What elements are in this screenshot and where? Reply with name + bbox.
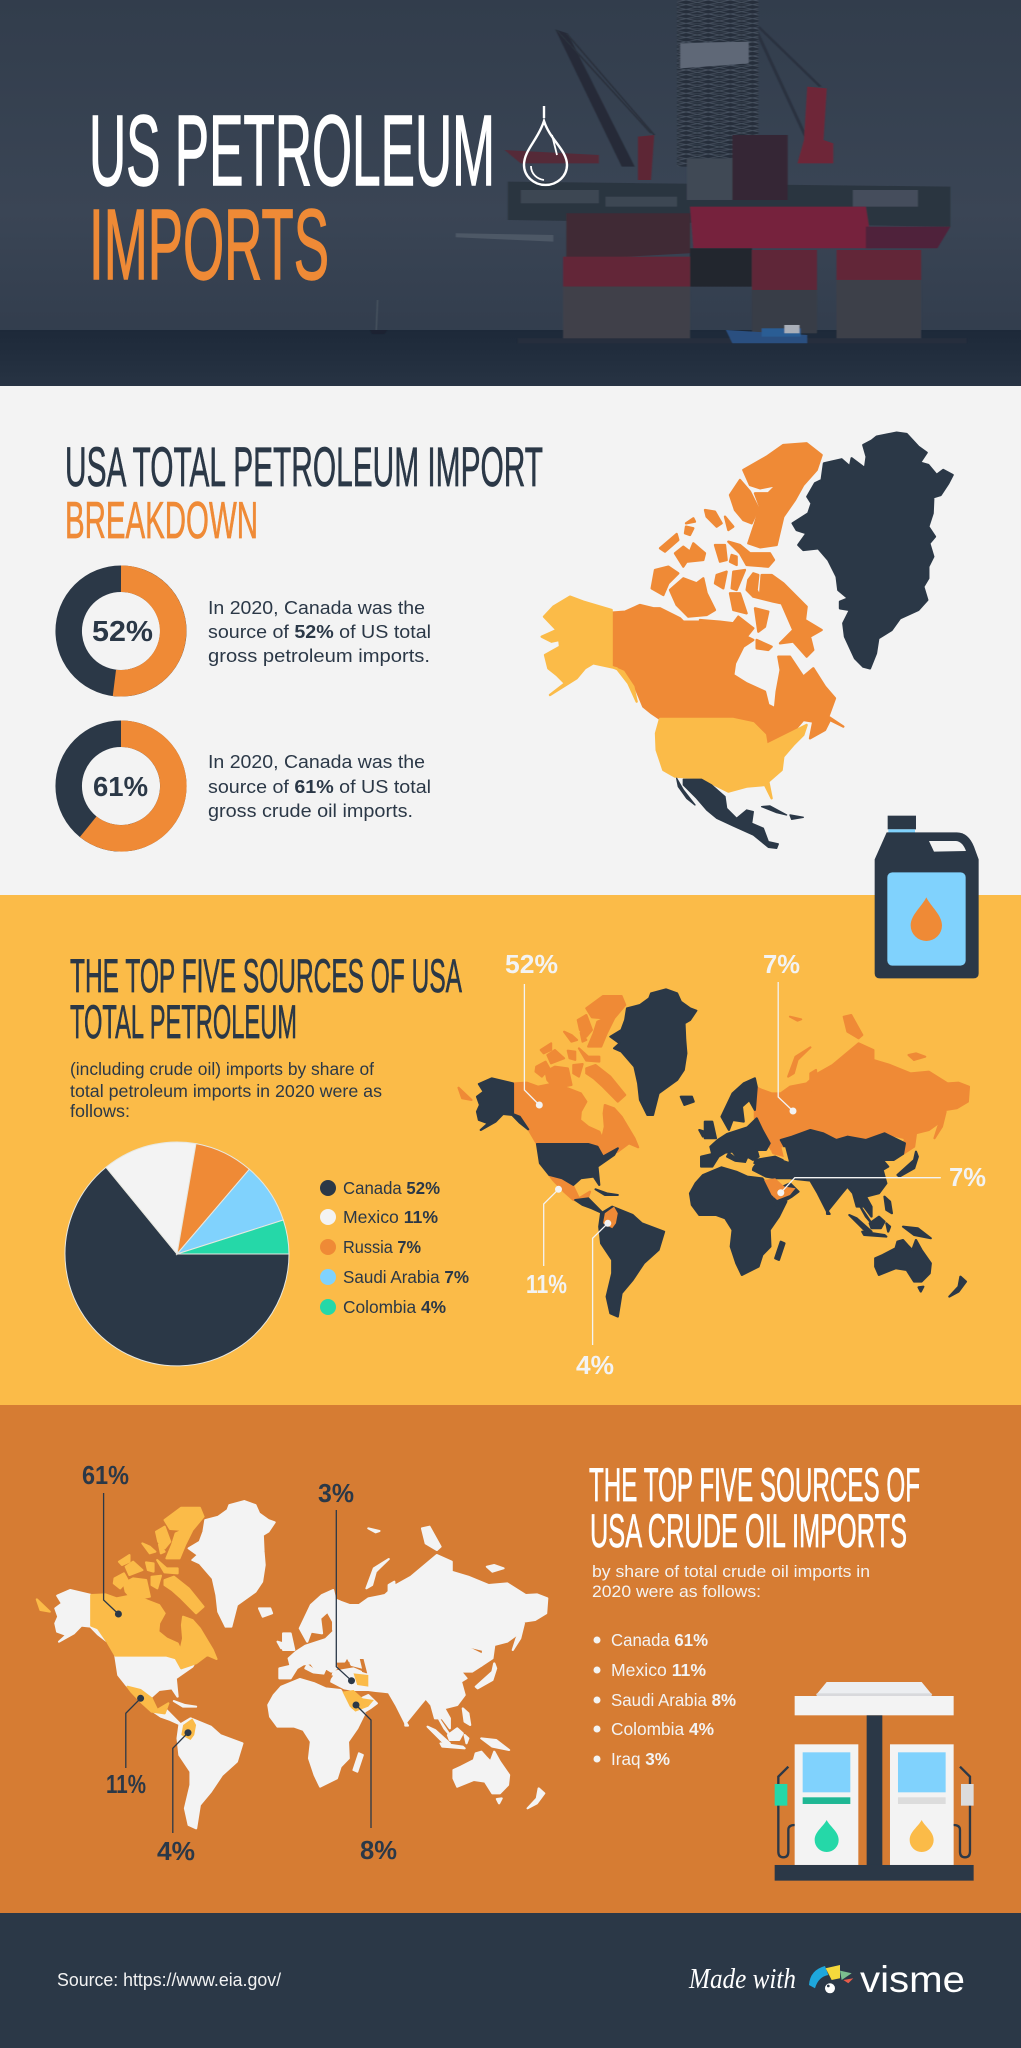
- illustration: oil rig: [370, 0, 967, 343]
- map: North America: [542, 433, 953, 848]
- heading: [65, 435, 543, 550]
- legend: Saudi Arabia 7%: [343, 1267, 469, 1287]
- legend: Colombia 4%: [343, 1297, 446, 1317]
- title: US PETROLEUM: [89, 95, 495, 207]
- donut chart 52%: 52%: [92, 616, 153, 648]
- heading: [589, 1458, 920, 1557]
- bullet list: [594, 1630, 736, 1769]
- bullet list: Mexico 11%: [611, 1660, 706, 1680]
- text block: intro: [70, 1059, 382, 1121]
- callouts: petroleum shares: 7%: [763, 949, 800, 979]
- text block: 52%: [208, 597, 431, 666]
- text block: intro: (including crude oil) imports by share of: [70, 1059, 374, 1079]
- donut chart 61%: 61%: [93, 771, 148, 802]
- icon: oil drop: [524, 106, 567, 185]
- callouts: crude oil shares: 11%: [106, 1769, 146, 1799]
- bullet list: Colombia 4%: [611, 1719, 714, 1739]
- legend: Russia 7%: [343, 1237, 421, 1257]
- callouts: crude oil shares: [82, 1460, 397, 1866]
- callouts: crude oil shares: 8%: [360, 1835, 397, 1865]
- title: IMPORTS: [89, 189, 329, 301]
- donut chart 52%: [69, 579, 173, 683]
- callouts: petroleum shares: 52%: [505, 949, 558, 979]
- callouts: crude oil shares: 3%: [318, 1478, 354, 1508]
- legend: [320, 1178, 469, 1317]
- callouts: crude oil shares: 4%: [157, 1836, 195, 1866]
- text block: 61%: gross crude oil imports.: [208, 800, 413, 821]
- callouts: petroleum shares: 7%: [949, 1162, 986, 1192]
- map: world, crude oil: [37, 1501, 547, 1828]
- heading: BREAKDOWN: [65, 492, 258, 550]
- panel: top five sources of crude oil: [0, 1405, 1021, 1913]
- heading: USA TOTAL PETROLEUM IMPORT: [65, 435, 543, 498]
- callouts: petroleum shares: [505, 949, 986, 1380]
- Greenland: [793, 433, 953, 668]
- icon: oil jerrycan: [875, 816, 979, 978]
- panel: hero photo of offshore oil rig: [0, 0, 1021, 386]
- panel: total import breakdown: [0, 386, 1021, 895]
- text block: 52%: gross petroleum imports.: [208, 645, 430, 666]
- legend: Mexico 11%: [343, 1207, 438, 1227]
- bullet list: Iraq 3%: [611, 1749, 670, 1769]
- logo: visme: [809, 1959, 965, 2000]
- heading: THE TOP FIVE SOURCES OF USA: [70, 949, 462, 1002]
- pie chart: [65, 1142, 289, 1366]
- panel: top five sources of total petroleum: [0, 895, 1021, 1405]
- icon: gas pumps: [775, 1682, 974, 1881]
- donut chart 61%: [69, 734, 173, 838]
- callouts: petroleum shares: 11%: [526, 1269, 567, 1299]
- text block: intro: 2020 were as follows:: [592, 1582, 761, 1601]
- text block: 61%: In 2020, Canada was the: [208, 751, 425, 772]
- callouts: petroleum shares: 4%: [576, 1350, 614, 1380]
- text block: 52%: source of 52% of US total: [208, 621, 431, 642]
- heading: TOTAL PETROLEUM: [70, 995, 297, 1048]
- map: world, petroleum: [459, 989, 969, 1317]
- title: [89, 95, 495, 301]
- heading: [70, 949, 462, 1048]
- text block: 61%: source of 61% of US total: [208, 776, 431, 797]
- bullet list: Saudi Arabia 8%: [611, 1690, 736, 1710]
- source text: Source: https://www.eia.gov/: [57, 1970, 281, 1990]
- Canada: [612, 443, 843, 745]
- panel: footer: [0, 1913, 1021, 2048]
- text block: intro: by share of total crude oil imports in: [592, 1562, 870, 1581]
- text block: 61%: [208, 751, 431, 821]
- legend: Canada 52%: [343, 1178, 440, 1198]
- text block: intro: total petroleum imports in 2020 were as: [70, 1081, 382, 1101]
- text block: intro: [592, 1562, 870, 1601]
- text block: 52%: In 2020, Canada was the: [208, 597, 425, 618]
- callouts: crude oil shares: 61%: [82, 1460, 129, 1490]
- bullet list: Canada 61%: [611, 1630, 708, 1650]
- logo: visme: visme: [860, 1959, 965, 2000]
- Mexico and Caribbean: [677, 778, 803, 848]
- made with: Made with: [688, 1964, 796, 1995]
- text block: intro: follows:: [70, 1101, 130, 1121]
- USA and Alaska: [542, 597, 807, 798]
